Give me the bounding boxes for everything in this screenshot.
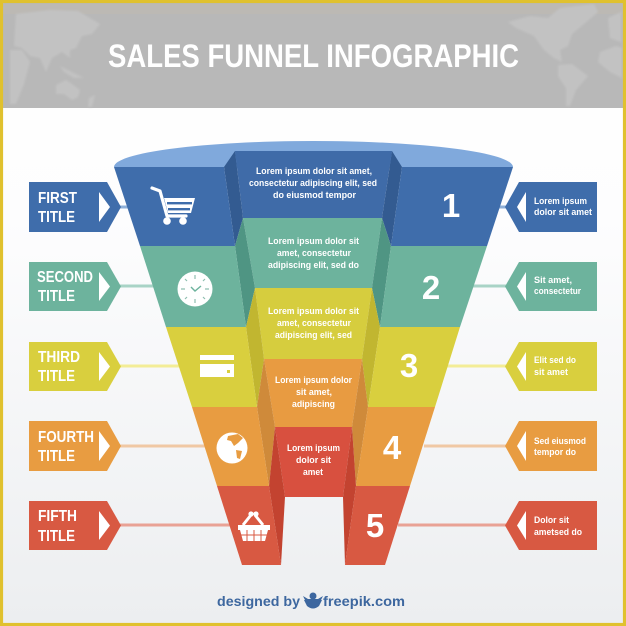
text: blue panel: consectetur adipiscing elit, sed	[249, 178, 377, 189]
left label: first	[29, 182, 121, 232]
text: green panel: amet, consectetur	[277, 248, 351, 259]
left label: second	[29, 262, 121, 311]
left label: first: TITLE	[38, 209, 75, 226]
text: yellow panel	[268, 306, 360, 341]
world map left	[10, 10, 100, 107]
numbers: 5	[366, 507, 384, 544]
icon: globe	[216, 432, 248, 464]
numbers	[366, 187, 460, 544]
right label: third	[505, 342, 597, 391]
icon: shopping cart	[152, 188, 195, 225]
text: yellow panel: amet, consectetur	[277, 318, 351, 329]
left label: second: TITLE	[38, 288, 75, 305]
left label: fourth: TITLE	[38, 448, 75, 465]
front right panels	[345, 167, 513, 565]
right label: fifth: Dolor sit	[534, 515, 570, 526]
left label: second: SECOND	[37, 269, 93, 286]
text: red panel: Lorem ipsum	[287, 443, 340, 454]
front left panels	[114, 167, 281, 565]
funnel	[114, 141, 513, 565]
world map right	[508, 4, 622, 106]
left label: third: THIRD	[38, 349, 80, 366]
text: red panel: amet	[303, 467, 324, 478]
back panel texts	[249, 166, 377, 478]
text: green panel: Lorem ipsum dolor sit	[268, 236, 360, 247]
text: green panel	[268, 236, 360, 271]
footer credit: designed by	[217, 593, 300, 609]
text: orange panel: Lorem ipsum dolor	[275, 375, 352, 386]
text: yellow panel: Lorem ipsum dolor sit	[268, 306, 360, 317]
right label: first	[505, 182, 597, 232]
side walls	[224, 151, 402, 565]
right label: third: sit amet	[534, 367, 569, 378]
left label: fourth: FOURTH	[38, 429, 94, 446]
back panels	[235, 151, 392, 497]
text: blue panel	[249, 166, 377, 201]
text: blue panel: do eiusmod tempor	[273, 190, 356, 201]
right label: fourth	[505, 421, 597, 471]
left label: fourth	[29, 421, 121, 471]
right label: fourth: Sed eiusmod	[534, 436, 586, 447]
text: orange panel	[275, 375, 352, 410]
numbers: 1	[442, 187, 460, 224]
footer credit	[217, 592, 405, 609]
text: orange panel: sit amet,	[296, 387, 332, 398]
icon: clock	[178, 272, 212, 306]
right label: fifth	[505, 501, 597, 550]
left label: fifth	[29, 501, 121, 550]
numbers: 2	[422, 269, 440, 306]
right label: fifth: ametsed do	[534, 527, 582, 538]
right label: first: dolor sit amet	[534, 207, 593, 218]
right label: third: Elit sed do	[534, 355, 576, 366]
title: SALES FUNNEL INFOGRAPHIC	[108, 38, 519, 74]
left label: fifth: FIFTH	[38, 508, 77, 525]
text: green panel: adipiscing elit, sed do	[268, 260, 359, 271]
connector lines	[120, 207, 506, 525]
right label: fourth: tempor do	[534, 447, 576, 458]
icon: freepik logo	[303, 592, 323, 608]
left label: first: FIRST	[38, 190, 77, 207]
left label: third: TITLE	[38, 368, 75, 385]
left label: fifth: TITLE	[38, 528, 75, 545]
funnel rim	[114, 141, 513, 167]
text: blue panel: Lorem ipsum dolor sit amet,	[256, 166, 372, 177]
text: red panel: dolor sit	[296, 455, 332, 466]
icon: credit card	[200, 355, 234, 377]
icon: basket	[238, 511, 270, 541]
right label: second: Sit amet,	[534, 275, 572, 286]
right label: second	[505, 262, 597, 311]
header band	[3, 3, 623, 108]
text: red panel	[287, 443, 340, 478]
right label: first: Lorem ipsum	[534, 196, 587, 207]
right label: second: consectetur	[534, 286, 581, 297]
left label: third	[29, 342, 121, 391]
text: orange panel: adipiscing	[292, 399, 335, 410]
numbers: 4	[383, 429, 402, 466]
footer credit: freepik.com	[323, 593, 405, 609]
numbers: 3	[400, 347, 418, 384]
text: yellow panel: adipiscing elit, sed	[275, 330, 352, 341]
